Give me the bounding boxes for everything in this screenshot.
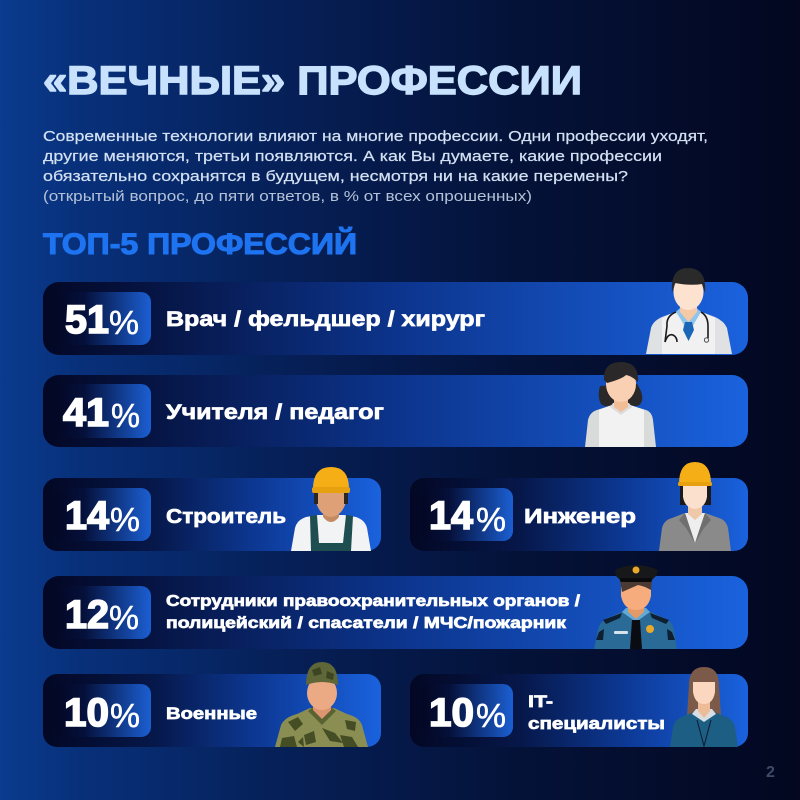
page number: 2 <box>766 764 775 781</box>
card: military 10% <box>43 662 381 747</box>
card: military 10%: 10 <box>64 691 109 735</box>
title: «ВЕЧНЫЕ» ПРОФЕССИИ <box>43 59 582 103</box>
card: IT specialists 10%: 10 <box>429 691 474 735</box>
card: IT specialists 10% <box>410 667 748 747</box>
card: builder 14%: Строитель <box>166 506 286 528</box>
card: IT specialists 10%: специалисты <box>528 714 665 733</box>
card: teacher 41%: Учителя / педагог <box>166 401 384 424</box>
icon: builder <box>291 467 371 551</box>
card: police 12%: % <box>109 599 139 636</box>
subheading: ТОП-5 ПРОФЕССИЙ <box>43 227 357 261</box>
card: police 12%: Сотрудники правоохранительных органов / <box>166 593 581 610</box>
card: police 12%: полицейский / спасатели / МЧС/пожарник <box>166 615 566 632</box>
intro text <box>43 129 708 205</box>
card: IT specialists 10%: % <box>476 697 506 734</box>
icon: teacher <box>585 362 656 447</box>
icon: doctor <box>646 268 732 354</box>
intro text: другие меняются, третьи появляются. А как Вы думаете, какие профессии <box>43 149 662 165</box>
card: teacher 41% <box>43 362 748 447</box>
intro text: обязательно сохранятся в будущем, несмотря ни на какие перемены? <box>43 169 628 185</box>
icon: police officer <box>594 565 677 649</box>
card: military 10%: Военные <box>166 704 257 723</box>
card: engineer 14%: Инженер <box>524 506 636 528</box>
card: IT specialists 10%: IT- <box>528 692 553 711</box>
card: builder 14% <box>43 467 381 551</box>
card: doctor 51% <box>43 268 748 355</box>
card: builder 14%: 14 <box>65 494 110 538</box>
card: doctor 51%: 51 <box>65 298 109 342</box>
card: police 12%: 12 <box>65 593 109 637</box>
intro text: Современные технологии влияют на многие профессии. Одни профессии уходят, <box>43 129 708 145</box>
card: doctor 51%: Врач / фельдшер / хирург <box>166 308 485 331</box>
icon: engineer <box>659 462 731 551</box>
card: engineer 14%: % <box>476 501 506 538</box>
card: engineer 14% <box>410 462 748 551</box>
card: engineer 14%: 14 <box>429 494 474 538</box>
card: teacher 41%: % <box>111 397 140 434</box>
card: teacher 41%: 41 <box>63 391 109 435</box>
icon: IT specialist <box>670 667 738 747</box>
card: military 10%: % <box>110 697 140 734</box>
intro text: (открытый вопрос, до пяти ответов, в % от всех опрошенных) <box>43 189 532 205</box>
icon: soldier <box>275 662 368 747</box>
card: police 12% <box>43 565 748 649</box>
card: doctor 51%: % <box>109 304 139 341</box>
card: builder 14%: % <box>110 501 140 538</box>
